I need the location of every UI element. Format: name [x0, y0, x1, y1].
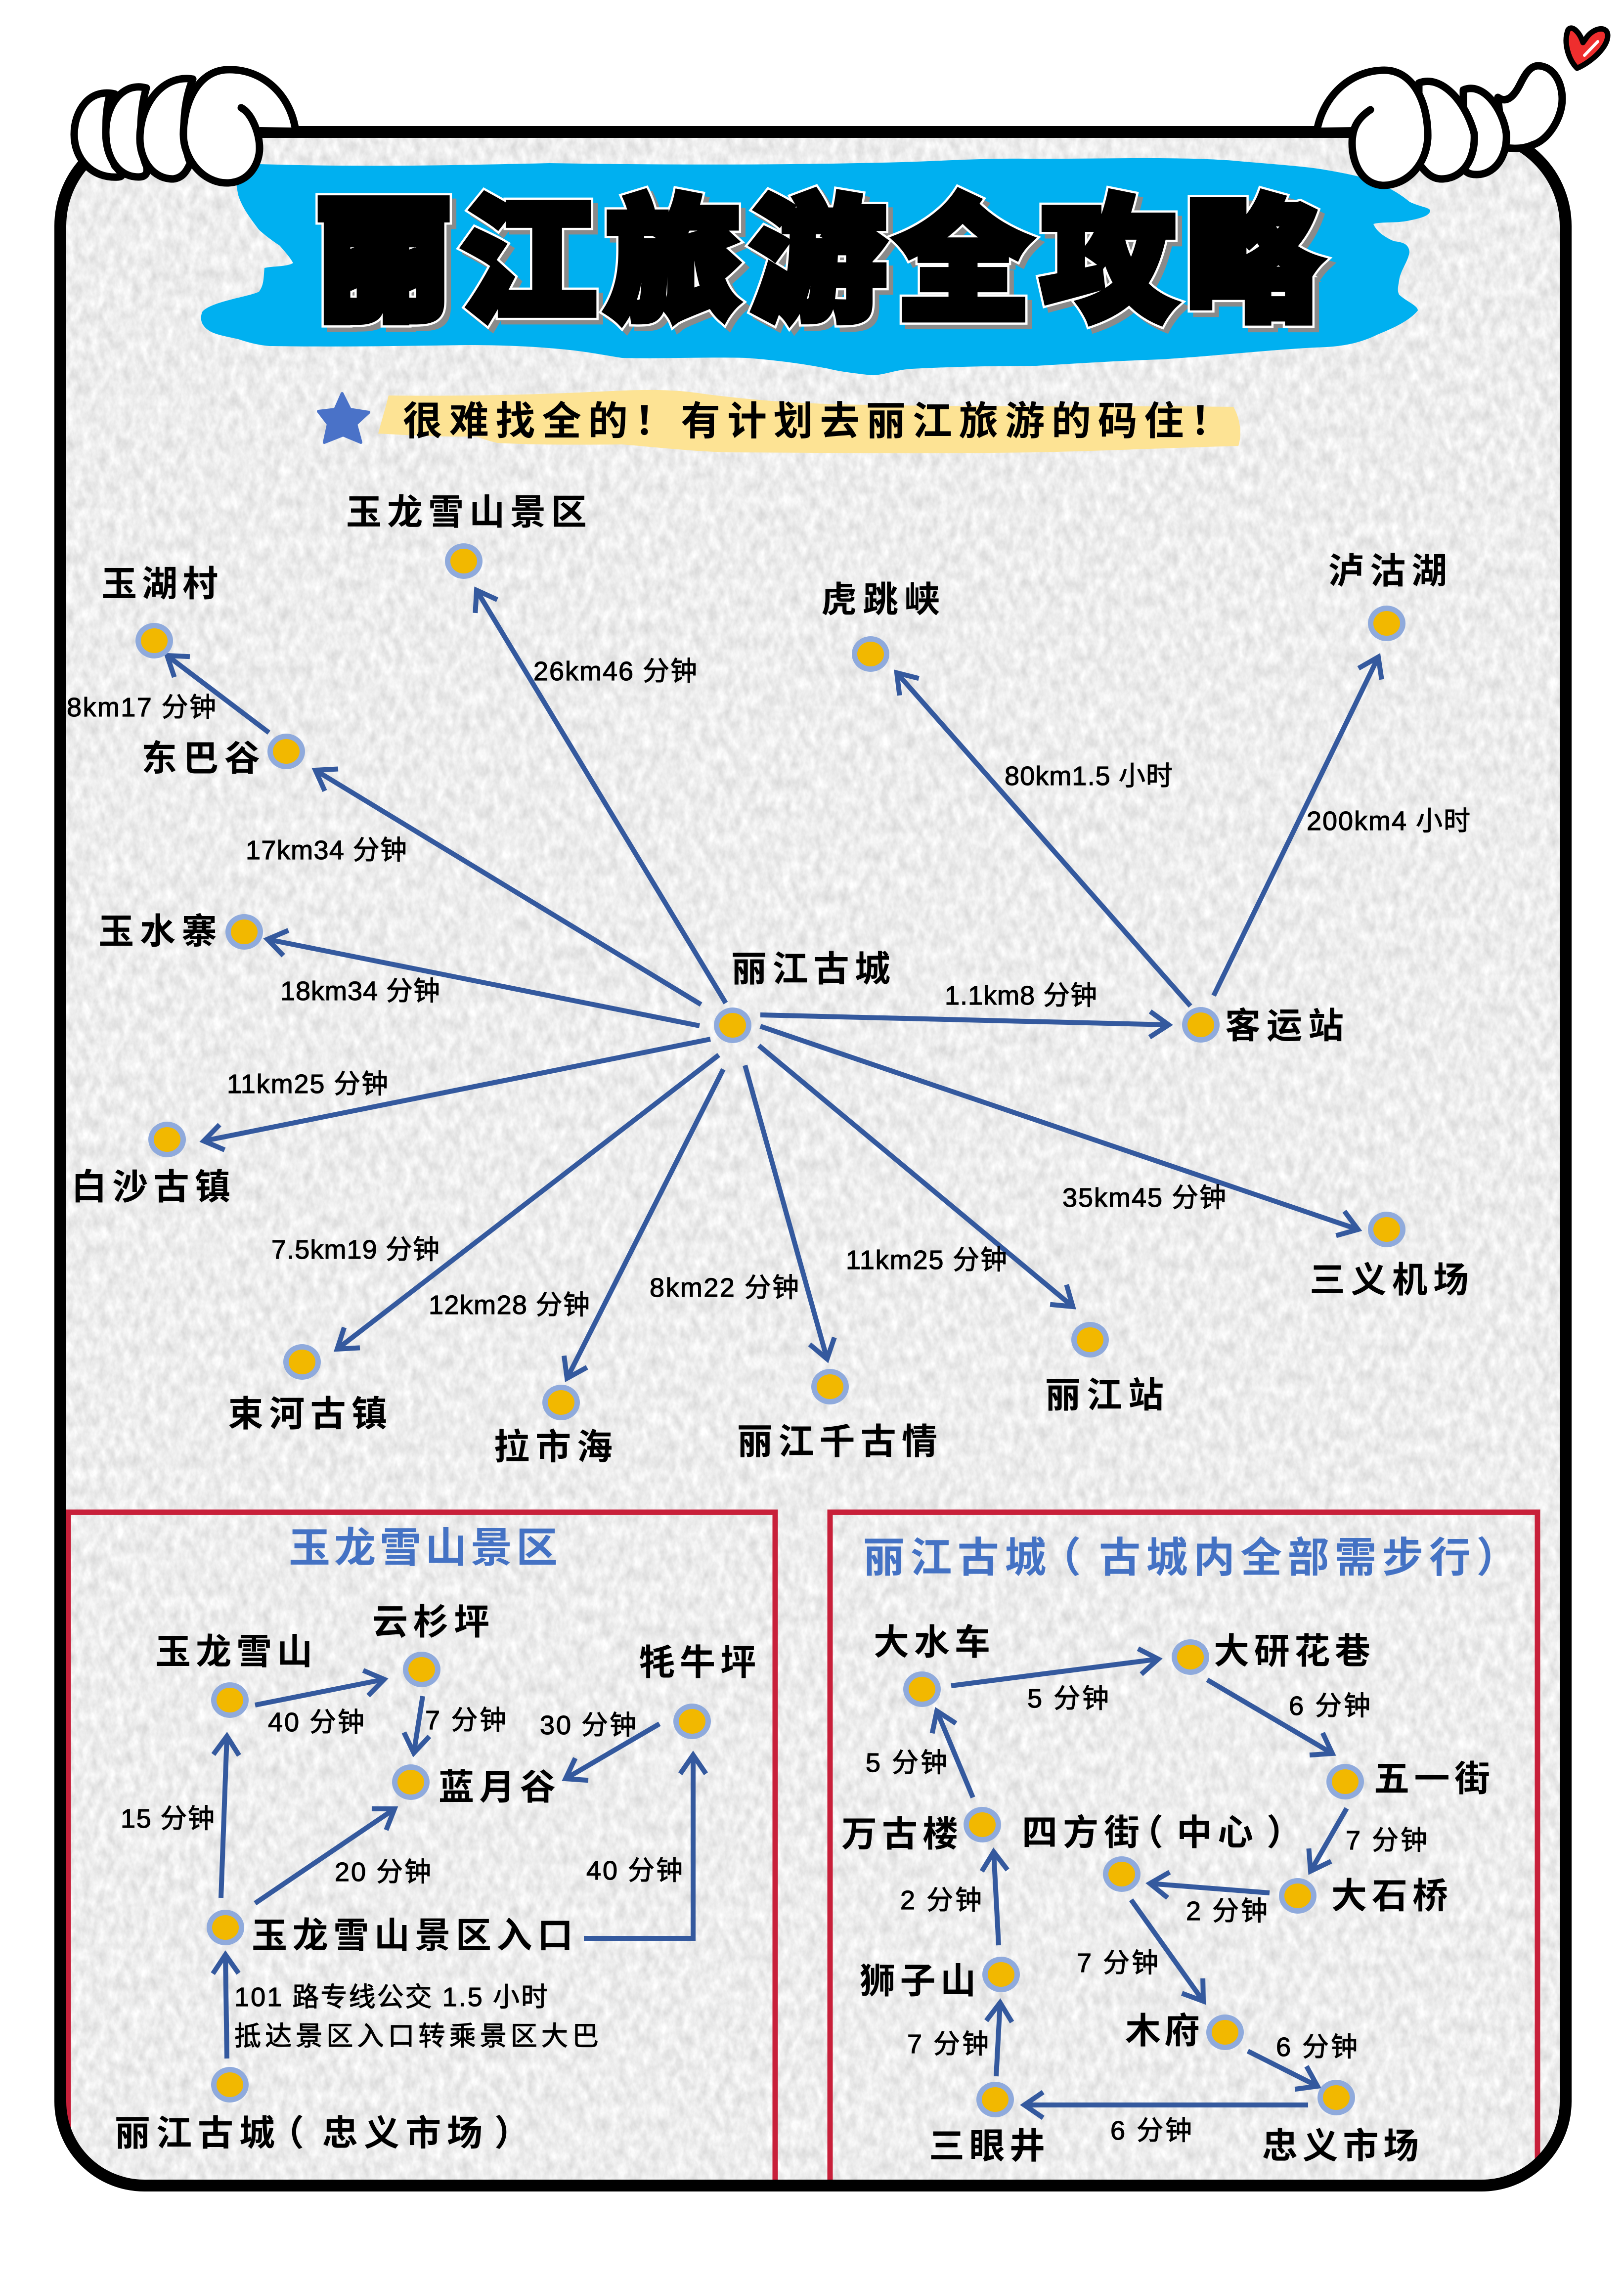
distance label: 8km22 分钟 — [650, 1273, 799, 1303]
arrow: 云杉坪 to 蓝月谷 — [414, 1696, 423, 1753]
label: 四方街（中心）: 四方街（中心） — [1022, 1813, 1308, 1853]
arrow: 古城 to 三义机场 — [760, 1026, 1358, 1229]
label: 五一街: 五一街 — [1374, 1759, 1490, 1799]
time label: 15 分钟 — [121, 1804, 215, 1834]
node: 玉龙雪山 — [211, 1682, 249, 1718]
bus note line 1: 101 路专线公交 1.5 小时 — [234, 1982, 548, 2012]
label: 大水车: 大水车 — [874, 1623, 990, 1663]
distance label: 18km34 分钟 — [280, 976, 440, 1006]
label: 玉龙雪山: 玉龙雪山 — [155, 1632, 312, 1672]
subtitle: 很难找全的！有计划去丽江旅游的码住！ — [403, 399, 1230, 443]
node: 虎跳峡 — [852, 636, 889, 672]
title: 丽江旅游全攻略 — [316, 187, 1320, 337]
node: 三义机场 — [1368, 1212, 1405, 1247]
time label: 20 分钟 — [335, 1857, 431, 1887]
arrow: 古城 to 客运站 — [760, 1015, 1169, 1025]
time label: 6 分钟 — [1289, 1691, 1370, 1721]
node: 景区入口 — [207, 1910, 244, 1945]
arrow: 古城 to 玉水寨 — [267, 939, 700, 1026]
label: 大研花巷: 大研花巷 — [1214, 1632, 1370, 1671]
label: 丽江千古情: 丽江千古情 — [737, 1422, 937, 1462]
label: 玉水寨: 玉水寨 — [98, 912, 217, 952]
panel: 丽江古城 box — [830, 1512, 1537, 2195]
distance label: 8km17 分钟 — [67, 693, 216, 722]
time label: 2 分钟 — [1186, 1896, 1268, 1926]
arrow: 四方街 to 木府 — [1131, 1900, 1203, 2001]
node: 丽江站 — [1071, 1322, 1109, 1358]
time label: 5 分钟 — [866, 1748, 947, 1778]
node: 大水车 — [903, 1671, 941, 1707]
arrow: 古城 to 白沙古镇 — [204, 1039, 710, 1141]
arrow: 入口 to 玉龙雪山 — [221, 1736, 227, 1898]
distance label: 11km25 分钟 — [227, 1069, 388, 1099]
arrow: 客运站 to 泸沽湖 — [1214, 657, 1378, 996]
arrow: 入口 to 蓝月谷 — [255, 1809, 395, 1903]
heading: 丽江古城（古城内全部需步行）: 丽江古城（ 古城内全部需步行） — [863, 1534, 1524, 1581]
node: 白沙古镇 — [148, 1122, 186, 1157]
time label: 6 分钟 — [1276, 2032, 1358, 2062]
arrow: 古城 to 丽江站 — [759, 1046, 1073, 1307]
label: 白沙古镇: 白沙古镇 — [71, 1168, 230, 1207]
node: 丽江古城（忠义市场） — [211, 2067, 249, 2103]
label: 丽江古城（忠义市场）: 丽江古城（ 忠义市场） — [115, 2114, 536, 2153]
arrow: 木府 to 忠义市场 — [1248, 2051, 1317, 2086]
label: 客运站: 客运站 — [1225, 1007, 1344, 1046]
arrow: 狮子山 to 万古楼 — [994, 1852, 999, 1945]
node: 狮子山 — [982, 1957, 1020, 1992]
icon: right hand — [1317, 66, 1562, 185]
icon: left hand — [74, 70, 295, 183]
time label: 40 分钟 — [268, 1708, 364, 1737]
label: 牦牛坪: 牦牛坪 — [639, 1643, 756, 1683]
time label: 7 分钟 — [907, 2029, 989, 2059]
label: 束河古镇: 束河古镇 — [228, 1395, 387, 1434]
arrow: 古城 to 拉市海 — [567, 1069, 723, 1378]
node: 云杉坪 — [403, 1652, 440, 1687]
time label: 5 分钟 — [1027, 1684, 1109, 1713]
label: 蓝月谷: 蓝月谷 — [439, 1768, 556, 1807]
node: 四方街 — [1103, 1856, 1141, 1892]
node: 玉水寨 — [225, 914, 263, 950]
distance label: 26km46 分钟 — [533, 657, 697, 686]
arrow: 牦牛坪 to 蓝月谷 — [566, 1724, 659, 1779]
title brush background — [201, 158, 1430, 375]
arrow: 入口 to 牦牛坪 — [584, 1755, 693, 1938]
time label: 6 分钟 — [1110, 2116, 1192, 2146]
label: 泸沽湖: 泸沽湖 — [1328, 552, 1447, 591]
label: 三义机场: 三义机场 — [1310, 1261, 1469, 1300]
subtitle highlight — [378, 390, 1240, 453]
arrow: 大石桥 to 四方街 — [1150, 1884, 1270, 1893]
distance label: 200km4 小时 — [1307, 806, 1470, 836]
distance label: 1.1km8 分钟 — [945, 981, 1097, 1010]
node: 拉市海 — [542, 1385, 580, 1420]
time label: 7 分钟 — [1077, 1948, 1158, 1978]
icon: heart — [1566, 28, 1608, 68]
node: 玉龙雪山景区 — [445, 543, 483, 579]
title: 丽江旅游全攻略 — [316, 187, 1320, 337]
time label: 2 分钟 — [900, 1885, 982, 1915]
label: 狮子山: 狮子山 — [860, 1962, 976, 2001]
distance label: 35km45 分钟 — [1062, 1183, 1226, 1213]
distance label: 17km34 分钟 — [246, 835, 407, 865]
arrow: 丽江古城 to 入口 — [225, 1955, 227, 2059]
label: 木府: 木府 — [1125, 2012, 1200, 2051]
node: 东巴谷 — [267, 734, 305, 769]
label: 万古楼: 万古楼 — [841, 1815, 958, 1854]
icon: star — [318, 394, 369, 442]
node: 牦牛坪 — [673, 1704, 711, 1739]
node: 五一街 — [1326, 1764, 1364, 1799]
arrow: 忠义市场 to 三眼井 — [1024, 2103, 1308, 2107]
node: 三眼井 — [976, 2082, 1014, 2117]
time label: 30 分钟 — [540, 1710, 636, 1740]
arrow: 五一街 to 大石桥 — [1311, 1808, 1347, 1871]
arrow: 古城 to 束河古镇 — [337, 1055, 719, 1349]
arrow: 古城 to 丽江千古情 — [745, 1065, 827, 1359]
arrow: 大研花巷 to 五一街 — [1207, 1680, 1332, 1753]
label: 丽江站: 丽江站 — [1045, 1376, 1164, 1415]
node: 忠义市场 — [1317, 2080, 1355, 2115]
label: 三眼井: 三眼井 — [929, 2127, 1045, 2166]
node: 束河古镇 — [283, 1344, 321, 1380]
label: 大石桥: 大石桥 — [1331, 1877, 1448, 1916]
arrow: 东巴谷 to 玉湖村 — [167, 656, 269, 733]
arrow: 玉龙雪山 to 云杉坪 — [255, 1679, 384, 1705]
node: 木府 — [1206, 2015, 1244, 2050]
node: 客运站 — [1182, 1007, 1220, 1043]
node: 泸沽湖 — [1368, 606, 1405, 641]
node: 大石桥 — [1279, 1878, 1317, 1914]
arrow: 三眼井 to 狮子山 — [996, 2003, 1000, 2076]
node: 大研花巷 — [1172, 1639, 1209, 1675]
distance label: 80km1.5 小时 — [1005, 761, 1173, 791]
arrow: 大水车 to 大研花巷 — [951, 1659, 1158, 1686]
label: 东巴谷: 东巴谷 — [141, 739, 260, 779]
label: 拉市海: 拉市海 — [494, 1428, 613, 1467]
heading: 玉龙雪山景区: 玉龙雪山景区 — [289, 1525, 558, 1571]
arrow: 万古楼 to 大水车 — [937, 1711, 973, 1797]
arrow: 古城 to 玉龙雪山景区 — [477, 590, 726, 1003]
arrow: 客运站 to 虎跳峡 — [897, 673, 1190, 1006]
time label: 40 分钟 — [586, 1856, 683, 1885]
node: 蓝月谷 — [392, 1764, 430, 1800]
arrow: 古城 to 东巴谷 — [315, 770, 701, 1005]
label: 玉湖村: 玉湖村 — [101, 565, 218, 604]
label: 云杉坪: 云杉坪 — [372, 1603, 489, 1642]
distance label: 7.5km19 分钟 — [271, 1235, 439, 1265]
label: 虎跳峡: 虎跳峡 — [821, 580, 940, 620]
node: 万古楼 — [964, 1807, 1001, 1842]
label: 玉龙雪山景区入口: 玉龙雪山景区入口 — [252, 1916, 573, 1956]
label: 玉龙雪山景区: 玉龙雪山景区 — [346, 493, 587, 532]
label: 丽江古城: 丽江古城 — [731, 950, 890, 989]
panel: 玉龙雪山景区 box — [68, 1512, 775, 2195]
distance label: 12km28 分钟 — [429, 1290, 590, 1320]
bus note line 2: 抵达景区入口转乘景区大巴 — [234, 2021, 599, 2051]
node: 玉湖村 — [135, 623, 173, 658]
node: 丽江千古情 — [811, 1369, 849, 1404]
title: 丽江旅游全攻略 — [321, 192, 1325, 342]
node: 丽江古城 — [714, 1008, 751, 1043]
time label: 7 分钟 — [425, 1706, 506, 1735]
label: 忠义市场: 忠义市场 — [1262, 2127, 1419, 2166]
distance label: 11km25 分钟 — [846, 1245, 1007, 1275]
time label: 7 分钟 — [1346, 1826, 1427, 1855]
